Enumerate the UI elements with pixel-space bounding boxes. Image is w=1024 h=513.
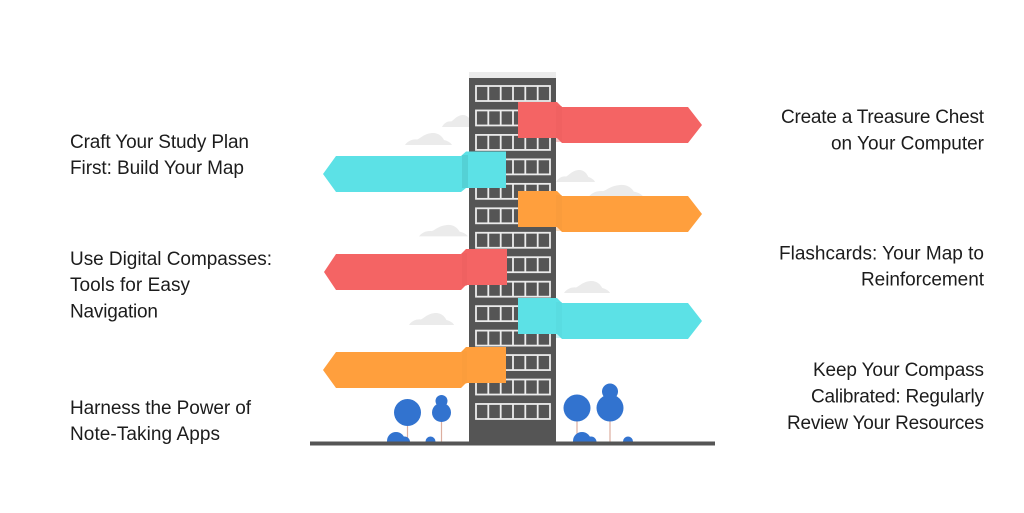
text: note-taking apps: Harness the Power of [70,398,252,419]
text: craft your study plan [70,132,249,179]
text: treasure chest: on Your Computer [831,134,985,154]
trees right [564,384,633,442]
text: note-taking apps [70,398,252,445]
text: treasure chest [781,107,985,154]
arrow: cyan left [323,152,506,192]
arrow: red left [324,249,507,290]
arrow: cyan right [518,298,702,339]
text: craft your study plan: First: Build Your Map [70,158,244,179]
text: compass calibrated: Keep Your Compass [813,360,984,381]
text: craft your study plan: Craft Your Study Plan [70,132,249,153]
arrow: orange left [323,347,506,388]
arrow: orange right [518,191,702,232]
arrow: red right [518,102,702,143]
text: compass calibrated [787,360,984,434]
text: use digital compasses: Navigation [70,302,158,322]
text: flashcards: Reinforcement [861,270,985,290]
text: use digital compasses [70,249,272,322]
building [469,72,556,443]
text: treasure chest: Create a Treasure Chest [781,107,985,128]
text: flashcards [779,244,985,290]
trees left [387,395,451,442]
text: note-taking apps: Note-Taking Apps [70,424,220,445]
text: compass calibrated: Calibrated: Regularly [811,386,984,408]
text: compass calibrated: Review Your Resources [787,413,984,434]
ground line [310,442,715,446]
text: use digital compasses: Tools for Easy [70,275,190,296]
text: use digital compasses: Use Digital Compasses: [70,249,272,270]
clouds [405,115,643,325]
text: flashcards: Flashcards: Your Map to [779,244,984,264]
